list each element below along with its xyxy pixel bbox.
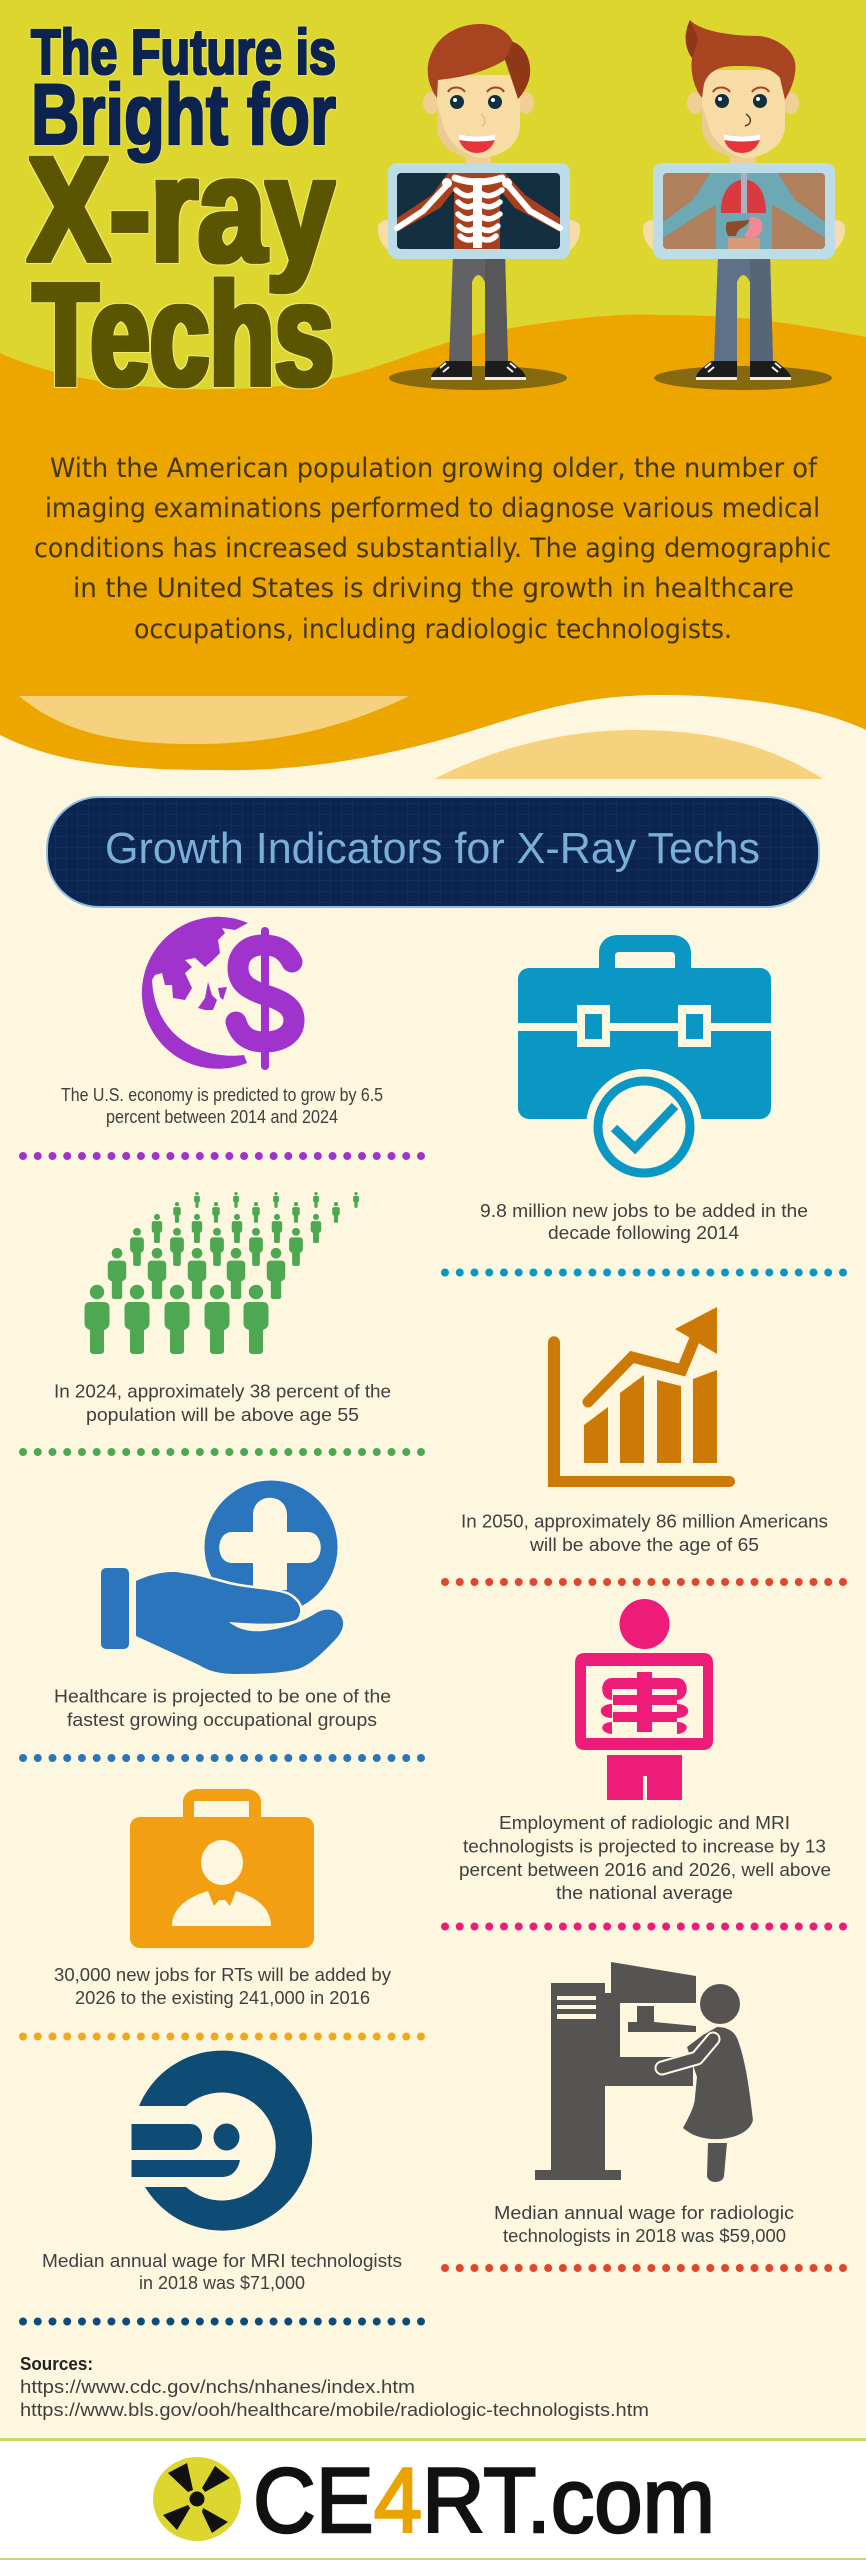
icon: technician at x-ray machine bbox=[535, 1962, 753, 2182]
item: economy growth bbox=[61, 917, 383, 1127]
logo: radiation symbol bbox=[153, 2457, 241, 2541]
caption: radiologic employment: Employment of radiologic and MRI bbox=[499, 1813, 790, 1833]
yellow header background bbox=[0, 0, 866, 420]
caption: new jobs bbox=[480, 1201, 808, 1243]
caption: radiologic employment: percent between 2016 and 2026, well above bbox=[459, 1860, 831, 1880]
item: new RT jobs bbox=[54, 1789, 391, 2008]
intro paragraph: imaging examinations performed to diagnose various medical bbox=[45, 493, 820, 524]
icon: crowd of people bbox=[84, 1192, 359, 1354]
caption: radiologic employment: the national average bbox=[556, 1883, 733, 1903]
illustration: technician with skeleton x-ray bbox=[378, 24, 580, 390]
caption: population: population will be above age 55 bbox=[86, 1405, 359, 1425]
caption: radiologic employment bbox=[459, 1813, 831, 1903]
sources bbox=[20, 2354, 649, 2420]
title: The Future is bbox=[31, 16, 336, 88]
caption: radiologic employment: technologists is projected to increase by 13 bbox=[463, 1836, 826, 1856]
title: X-ray bbox=[28, 125, 334, 293]
illustration: technician with organ x-ray bbox=[643, 20, 845, 390]
caption: economy: percent between 2014 and 2024 bbox=[106, 1107, 338, 1127]
caption: healthcare: Healthcare is projected to be one of the bbox=[54, 1686, 391, 1706]
icon: hand holding medical cross bbox=[101, 1480, 343, 1674]
section heading pill bbox=[47, 797, 819, 907]
intro paragraph bbox=[34, 453, 831, 645]
section heading pill: Growth Indicators for X-Ray Techs bbox=[105, 824, 760, 873]
logo wordmark: CE4RT.com bbox=[253, 2450, 715, 2552]
item: older Americans bbox=[461, 1307, 828, 1555]
item: healthcare bbox=[54, 1480, 391, 1730]
orange wave band bbox=[0, 315, 866, 770]
light wave accent right bbox=[434, 730, 823, 779]
sources: Sources: bbox=[20, 2354, 93, 2374]
caption: MRI wage: Median annual wage for MRI technologists bbox=[42, 2251, 402, 2271]
caption: radiologic wage bbox=[494, 2203, 794, 2246]
caption: new jobs: decade following 2014 bbox=[548, 1223, 739, 1243]
sources: https://www.bls.gov/ooh/healthcare/mobile/radiologic-technologists.htm bbox=[20, 2400, 649, 2420]
sources: https://www.cdc.gov/nchs/nhanes/index.htm bbox=[20, 2377, 415, 2397]
icon: rising bar chart bbox=[548, 1307, 735, 1487]
caption: RT jobs bbox=[54, 1965, 391, 2008]
item: radiologic wage bbox=[494, 1962, 794, 2246]
caption: economy: The U.S. economy is predicted to grow by 6.5 bbox=[61, 1085, 383, 1105]
icon: MRI scanner bbox=[132, 2051, 312, 2231]
icon: orange case with person bbox=[130, 1789, 314, 1948]
title: Bright for bbox=[31, 67, 336, 163]
caption: healthcare bbox=[54, 1686, 391, 1730]
caption: older Americans: In 2050, approximately 86 million Americans bbox=[461, 1512, 828, 1532]
caption: older Americans bbox=[461, 1512, 828, 1555]
intro paragraph: occupations, including radiologic technologists. bbox=[134, 614, 732, 645]
title bbox=[28, 16, 336, 417]
intro paragraph: in the United States is driving the growth in healthcare bbox=[73, 573, 794, 604]
caption: healthcare: fastest growing occupational groups bbox=[67, 1710, 377, 1730]
item: aging population bbox=[54, 1192, 391, 1425]
icon: person behind x-ray screen bbox=[575, 1599, 713, 1800]
caption: population bbox=[54, 1382, 391, 1425]
caption: MRI wage: in 2018 was $71,000 bbox=[139, 2273, 305, 2293]
caption: radiologic wage: Median annual wage for radiologic bbox=[494, 2203, 794, 2223]
caption: new jobs: 9.8 million new jobs to be added in the bbox=[480, 1201, 808, 1221]
caption: RT jobs: 2026 to the existing 241,000 in 2016 bbox=[75, 1988, 370, 2008]
intro paragraph: With the American population growing older, the number of bbox=[50, 453, 818, 484]
icon: globe and dollar bbox=[142, 917, 294, 1070]
caption: older Americans: will be above the age of 65 bbox=[529, 1535, 759, 1555]
caption: RT jobs: 30,000 new jobs for RTs will be added by bbox=[54, 1965, 391, 1985]
caption: radiologic wage: technologists in 2018 was $59,000 bbox=[503, 2226, 786, 2246]
title: Techs bbox=[33, 253, 334, 417]
footer band bbox=[0, 2438, 866, 2560]
item: radiologic employment bbox=[459, 1599, 831, 1903]
light wave accent left bbox=[19, 696, 409, 744]
item: MRI wage bbox=[42, 2051, 402, 2293]
intro paragraph: conditions has increased substantially. The aging demographic bbox=[34, 533, 831, 564]
item: new jobs bbox=[480, 935, 808, 1243]
caption: MRI wage bbox=[42, 2251, 402, 2293]
icon: briefcase with check bbox=[518, 935, 771, 1185]
caption: economy bbox=[61, 1085, 383, 1127]
caption: population: In 2024, approximately 38 percent of the bbox=[54, 1382, 391, 1402]
